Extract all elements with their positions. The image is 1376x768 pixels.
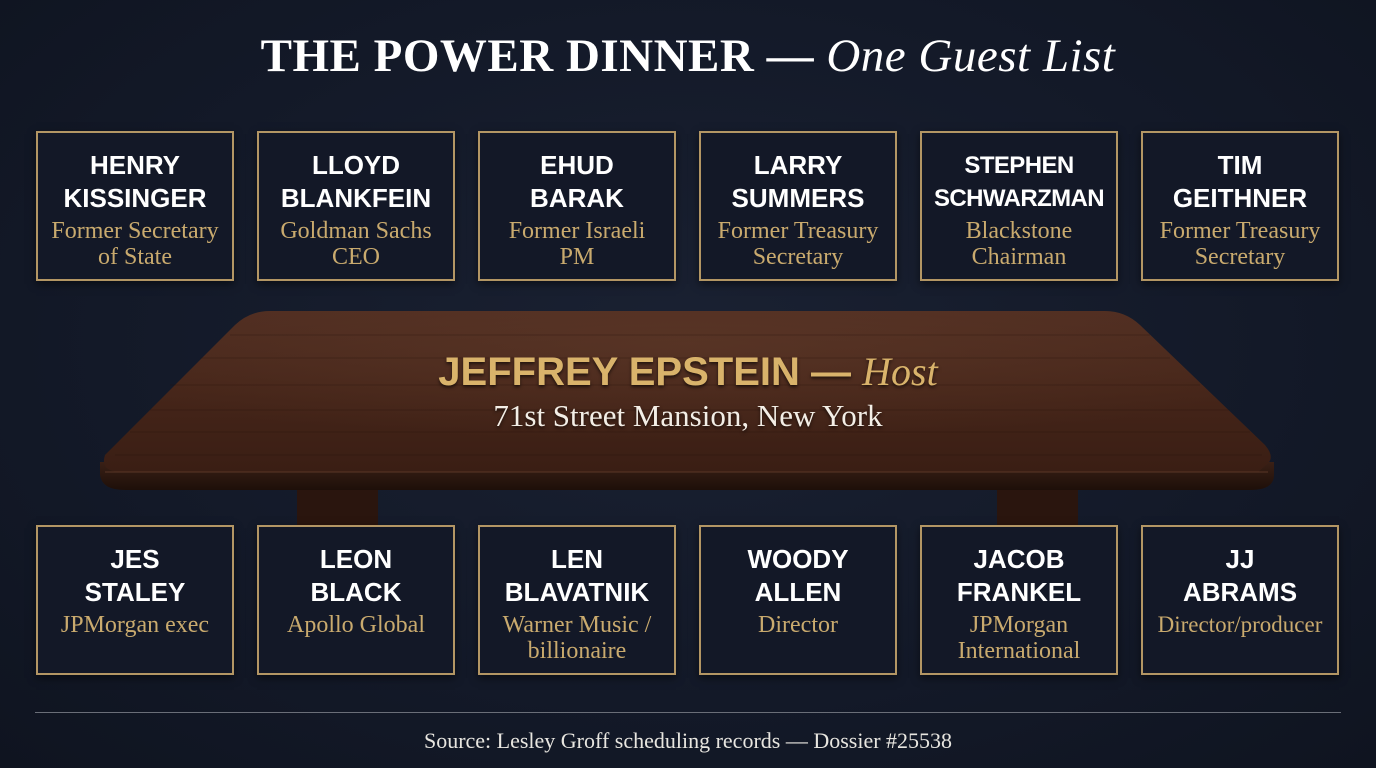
- card: Jes Staley: JES: [110, 544, 160, 574]
- card: Tim Geithner: TIM: [1218, 150, 1262, 180]
- card: Lloyd Blankfein: [257, 131, 455, 281]
- host location: 71st Street Mansion, New York: [493, 398, 883, 433]
- card: Woody Allen: [699, 525, 897, 675]
- top: [104, 311, 1271, 472]
- card: Woody Allen: Director: [758, 612, 838, 638]
- card: JJ Abrams: ABRAMS: [1183, 577, 1297, 607]
- card: Lloyd Blankfein: BLANKFEIN: [281, 183, 431, 213]
- card: Larry Summers: [699, 131, 897, 281]
- card: Stephen Schwarzman: [920, 131, 1118, 281]
- card: Len Blavatnik: Warner Music /: [503, 612, 651, 638]
- card: Jes Staley: [36, 525, 234, 675]
- card: Ehud Barak: Former Israeli: [509, 218, 645, 244]
- card: Henry Kissinger: [36, 131, 234, 281]
- card: Leon Black: BLACK: [310, 577, 402, 607]
- source note: Source: Lesley Groff scheduling records — Dossier #25538: [424, 728, 952, 753]
- card: Leon Black: [257, 525, 455, 675]
- edge: [100, 462, 1274, 490]
- card: Tim Geithner: GEITHNER: [1173, 183, 1307, 213]
- card: Henry Kissinger: Former Secretary: [51, 218, 219, 244]
- card: Ehud Barak: PM: [560, 244, 594, 270]
- card: Leon Black: Apollo Global: [287, 612, 425, 638]
- card: Stephen Schwarzman: SCHWARZMAN: [934, 185, 1104, 212]
- card: Stephen Schwarzman: STEPHEN: [964, 152, 1074, 179]
- card: Larry Summers: Secretary: [753, 244, 843, 270]
- host heading: JEFFREY EPSTEIN — Host: [438, 349, 938, 394]
- card: Jes Staley: STALEY: [85, 577, 185, 607]
- legs: [297, 480, 378, 526]
- card: Jacob Frankel: International: [958, 638, 1080, 664]
- card: Jes Staley: JPMorgan exec: [61, 612, 209, 638]
- card: JJ Abrams: [1141, 525, 1339, 675]
- card: Len Blavatnik: BLAVATNIK: [505, 577, 649, 607]
- card: JJ Abrams: JJ: [1226, 544, 1254, 574]
- card: Len Blavatnik: [478, 525, 676, 675]
- card: Lloyd Blankfein: Goldman Sachs: [280, 218, 432, 244]
- card: Larry Summers: LARRY: [754, 150, 842, 180]
- card: Leon Black: LEON: [320, 544, 392, 574]
- card: Woody Allen: WOODY: [747, 544, 849, 574]
- card: Tim Geithner: Former Treasury: [1160, 218, 1320, 244]
- card: Larry Summers: Former Treasury: [718, 218, 878, 244]
- card: Jacob Frankel: [920, 525, 1118, 675]
- card: Henry Kissinger: of State: [98, 244, 172, 270]
- card: Ehud Barak: BARAK: [530, 183, 624, 213]
- card: JJ Abrams: Director/producer: [1158, 612, 1322, 637]
- card: Len Blavatnik: LEN: [551, 544, 603, 574]
- card: Len Blavatnik: billionaire: [528, 638, 626, 664]
- card: Jacob Frankel: JACOB: [973, 544, 1064, 574]
- card: Henry Kissinger: KISSINGER: [63, 183, 207, 213]
- title: THE POWER DINNER — One Guest List: [261, 30, 1115, 82]
- card: Tim Geithner: Secretary: [1195, 244, 1285, 270]
- card: Larry Summers: SUMMERS: [732, 183, 864, 213]
- card: Woody Allen: ALLEN: [755, 577, 841, 607]
- card: Ehud Barak: [478, 131, 676, 281]
- card: Jacob Frankel: JPMorgan: [970, 612, 1068, 638]
- card: Ehud Barak: EHUD: [540, 150, 614, 180]
- card: Stephen Schwarzman: Chairman: [972, 244, 1066, 270]
- card: Henry Kissinger: HENRY: [90, 150, 180, 180]
- card: Tim Geithner: [1141, 131, 1339, 281]
- card: Jacob Frankel: FRANKEL: [957, 577, 1081, 607]
- card: Stephen Schwarzman: Blackstone: [966, 218, 1072, 244]
- card: Lloyd Blankfein: LLOYD: [312, 150, 400, 180]
- card: Lloyd Blankfein: CEO: [332, 244, 380, 270]
